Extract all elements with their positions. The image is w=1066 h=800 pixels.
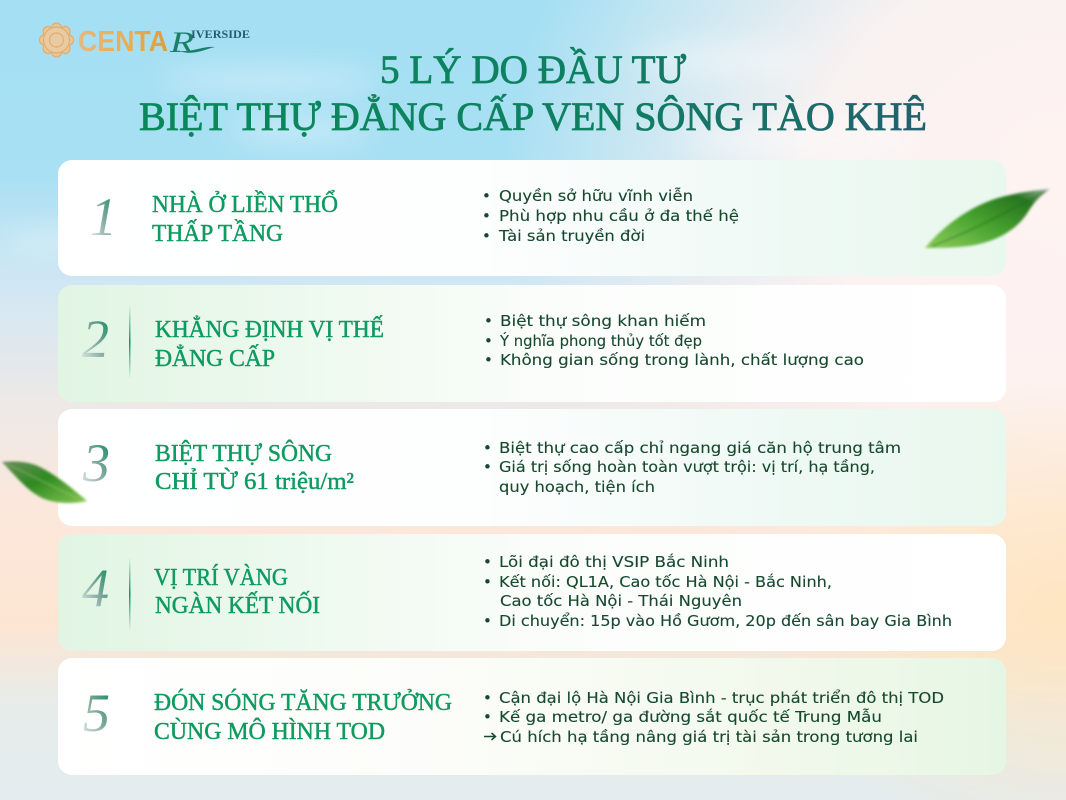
bullets 4: • [483, 573, 492, 591]
bullets 3: • [483, 439, 492, 457]
bullets 2: • [484, 312, 493, 330]
bullets 5: • [483, 689, 492, 707]
heading 1: NHÀ Ở LIỀN THỔ [152, 191, 338, 218]
number 1: 1 [90, 187, 117, 247]
divider 2 [129, 305, 130, 379]
heading 4 [154, 565, 320, 619]
bullets 5: Kế ga metro/ ga đường sắt quốc tế Trung Mẫu [499, 708, 882, 726]
logo script R: R [169, 26, 194, 59]
logo riverside: IVERSIDE [191, 29, 250, 41]
heading 3: BIỆT THỰ SÔNG [155, 440, 332, 467]
panel 5: đón sóng tăng trưởng [58, 658, 1006, 775]
number 3: 3 [82, 433, 110, 493]
panel 1: nhà ở liền thổ [58, 160, 1006, 276]
bullets 4: • [483, 612, 492, 630]
heading 4: NGÀN KẾT NỐI [155, 592, 320, 619]
bullets 4: • [483, 553, 492, 571]
logo swoosh [176, 47, 215, 53]
panel 3: biệt thự sông [58, 409, 1006, 526]
heading 2 [155, 316, 384, 372]
bullets 1: • [482, 207, 491, 225]
bullets 3: • [483, 458, 492, 476]
icon: gold flower emblem [40, 23, 74, 57]
bullets 3 [483, 439, 901, 496]
bullets 2: Không gian sống trong lành, chất lượng cao [500, 351, 864, 369]
heading 4: VỊ TRÍ VÀNG [154, 565, 288, 591]
panel 4: vị trí vàng [58, 534, 1006, 651]
bullets 1: Phù hợp nhu cầu ở đa thế hệ [499, 207, 739, 225]
heading 2: KHẲNG ĐỊNH VỊ THẾ [155, 316, 384, 343]
bullets 4: Lõi đại đô thị VSIP Bắc Ninh [499, 553, 729, 571]
bullets 4: Kết nối: QL1A, Cao tốc Hà Nội - Bắc Ninh, [499, 573, 832, 591]
title line 2: BIỆT THỰ ĐẲNG CẤP VEN SÔNG TÀO KHÊ [139, 94, 927, 139]
bullets 4: Di chuyển: 15p vào Hồ Gươm, 20p đến sân bay Gia Bình [499, 612, 952, 630]
bullets 1: Quyền sở hữu vĩnh viễn [499, 187, 693, 205]
divider 4 [129, 557, 130, 631]
bullets 3: Biệt thự cao cấp chỉ ngang giá căn hộ trung tâm [499, 439, 901, 457]
bullets 2: • [484, 351, 493, 369]
bullets 3: quy hoạch, tiện ích [499, 478, 655, 496]
title line 1: 5 LÝ DO ĐẦU TƯ [380, 47, 686, 92]
bullets 4: Cao tốc Hà Nội - Thái Nguyên [500, 592, 742, 610]
bullets 1: • [482, 227, 491, 245]
panel 2: khẳng định vị thế [58, 285, 1006, 402]
bullets 5: Cú hích hạ tầng nâng giá trị tài sản trong tương lai [500, 728, 918, 746]
bullets 5 [483, 689, 944, 746]
arrow [484, 733, 496, 740]
title [139, 47, 927, 139]
bullets 4 [483, 553, 952, 630]
heading 2: ĐẲNG CẤP [155, 345, 275, 372]
clouds [0, 46, 920, 248]
number 2: 2 [82, 309, 109, 369]
bullets 2: Ý nghĩa phong thủy tốt đẹp [499, 331, 702, 350]
logo: Centa Riverside [40, 23, 250, 59]
bullets 2 [484, 312, 864, 369]
icon: leaf top right [925, 189, 1050, 248]
bullets 2: • [484, 332, 493, 350]
bullets 5: Cận đại lộ Hà Nội Gia Bình - trục phát triển đô thị TOD [499, 689, 944, 707]
heading 3 [155, 440, 354, 495]
bullets 1 [482, 187, 739, 245]
heading 5: CÙNG MÔ HÌNH TOD [154, 718, 385, 745]
bullets 5: • [483, 708, 492, 726]
bullets 1: • [482, 187, 491, 205]
bullets 3: Giá trị sống hoàn toàn vượt trội: vị trí, hạ tầng, [499, 458, 875, 476]
number 4: 4 [82, 558, 109, 618]
heading 3: CHỈ TỪ 61 triệu/m² [155, 468, 354, 495]
heading 5: ĐÓN SÓNG TĂNG TRƯỞNG [154, 689, 452, 716]
icon: leaf left [2, 462, 87, 503]
heading 5 [154, 689, 452, 745]
logo wordmark: CENTA [78, 26, 168, 58]
bullets 2: Biệt thự sông khan hiếm [500, 312, 706, 330]
heading 1 [152, 191, 338, 247]
bullets 1: Tài sản truyền đời [498, 227, 645, 245]
heading 1: THẤP TẦNG [152, 220, 283, 247]
number 5: 5 [83, 683, 110, 743]
